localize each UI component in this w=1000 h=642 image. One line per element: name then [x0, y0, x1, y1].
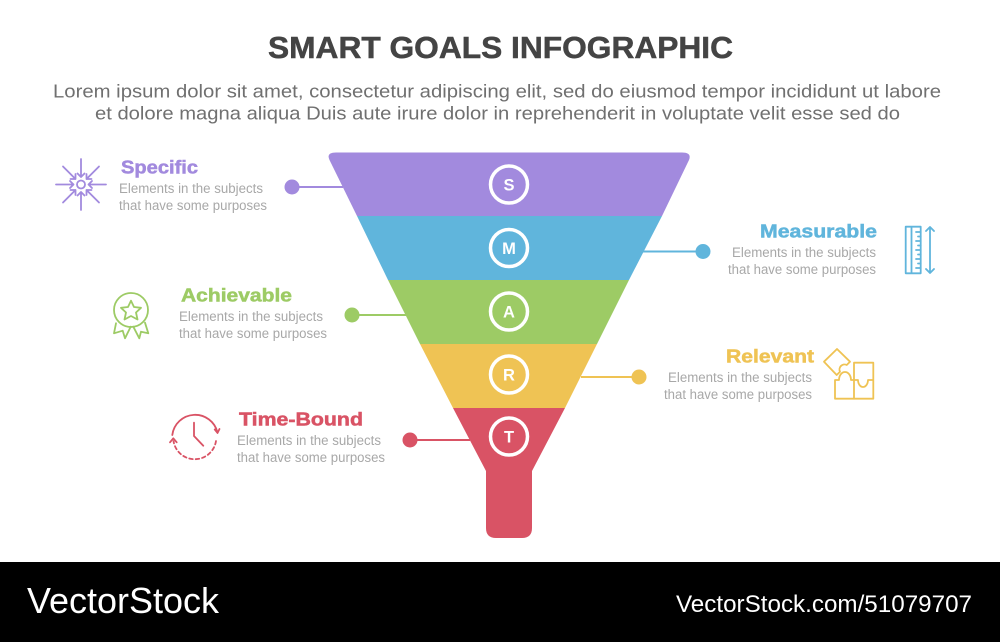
badge: R [490, 356, 528, 393]
connector: Achievable [344, 308, 407, 322]
text block: Time-Bound [237, 408, 385, 465]
funnel band: A [388, 280, 629, 344]
text block: Achievable: Elements in the subjects [179, 309, 323, 324]
title: SMART GOALS INFOGRAPHIC [268, 30, 733, 65]
intro text [53, 80, 941, 124]
intro text: Lorem ipsum dolor sit amet, consectetur adipiscing elit, sed do eiusmod tempor incididunt ut labore [53, 80, 941, 102]
icon: ruler and arrow [906, 227, 934, 273]
icon: clock with cycle arrows [170, 415, 220, 459]
footer logo: VectorStock [27, 580, 220, 621]
badge: S [490, 166, 528, 203]
connector: Time-Bound [402, 432, 470, 448]
text block: Relevant [664, 346, 814, 402]
footer bar [0, 562, 1000, 642]
badge: T [490, 418, 528, 455]
badge: M [490, 230, 528, 266]
funnel band: S [329, 152, 690, 216]
badge: T: T [504, 428, 514, 446]
text block: Achievable: Achievable [181, 284, 292, 306]
text block: Relevant: that have some purposes [664, 387, 812, 402]
text block: Achievable [179, 284, 327, 341]
text block: Measurable: Elements in the subjects [732, 245, 876, 260]
funnel band: M [357, 216, 662, 280]
funnel chart [329, 152, 690, 538]
funnel band: T with stem [453, 408, 565, 538]
text block: Specific: Specific [121, 156, 198, 178]
text block: Achievable: that have some purposes [179, 326, 327, 341]
text block: Relevant: Relevant [726, 346, 814, 366]
badge: S: S [503, 176, 515, 194]
text block: Specific: that have some purposes [119, 198, 267, 213]
badge: R: R [503, 366, 515, 384]
footer url: VectorStock.com/51079707 [676, 591, 972, 618]
text block: Specific: Elements in the subjects [119, 181, 263, 196]
badge: M: M [502, 240, 516, 258]
connector: Relevant [581, 370, 646, 384]
icon: converging arrows [56, 159, 106, 210]
text block: Time-Bound: that have some purposes [237, 450, 385, 465]
connector: Specific [284, 180, 343, 194]
text block: Relevant: Elements in the subjects [668, 370, 812, 385]
connector: Measurable [643, 244, 710, 259]
icon: puzzle pieces [824, 349, 873, 399]
intro text: et dolore magna aliqua Duis aute irure dolor in reprehenderit in voluptate velit esse sed do [95, 102, 900, 124]
text block: Measurable: that have some purposes [728, 262, 876, 277]
text block: Time-Bound: Elements in the subjects [237, 433, 381, 448]
funnel band: R [420, 344, 597, 408]
text block: Measurable: Measurable [760, 220, 877, 242]
icon: award ribbon [114, 293, 148, 338]
badge: A [490, 293, 528, 330]
badge: A: A [503, 304, 515, 322]
text block: Specific [119, 156, 267, 213]
text block: Measurable [728, 220, 877, 277]
text block: Time-Bound: Time-Bound [239, 408, 363, 430]
